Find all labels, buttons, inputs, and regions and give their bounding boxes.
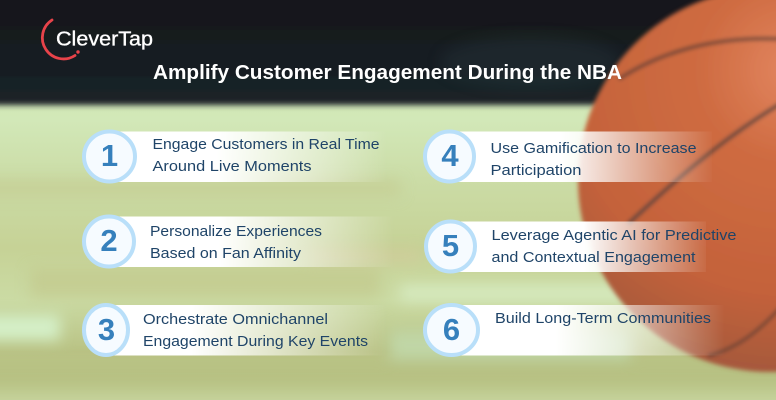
item 3: Orchestrate Omnichannel	[143, 311, 328, 328]
item 2	[84, 216, 395, 267]
item 4: Use Gamification to Increase	[490, 140, 696, 157]
item 4	[425, 132, 712, 182]
item 4: 4	[441, 138, 459, 173]
item 3: Engagement During Key Events	[143, 333, 368, 350]
item 2: Personalize Experiences	[150, 223, 322, 240]
item 6	[425, 305, 725, 356]
item 6: 6	[443, 312, 460, 347]
item 5: 5	[442, 228, 459, 263]
item 1: Around Live Moments	[152, 158, 312, 175]
logo: CleverTap	[42, 20, 153, 59]
item 1: 1	[101, 138, 118, 173]
item 3	[84, 305, 388, 356]
logo: CleverTap: CleverTap	[56, 28, 153, 50]
item 5	[426, 222, 736, 272]
item 1: Engage Customers in Real Time	[152, 136, 380, 153]
basketball	[578, 0, 776, 372]
item 2: Based on Fan Affinity	[150, 245, 302, 262]
item 2: 2	[100, 223, 118, 258]
title: Amplify Customer Engagement During the NBA	[153, 62, 622, 84]
item 1	[84, 132, 388, 182]
item 5: Leverage Agentic AI for Predictive	[492, 227, 736, 244]
item 4: Participation	[490, 162, 582, 179]
item 6: Build Long-Term Communities	[495, 310, 711, 327]
item 5: and Contextual Engagement	[492, 249, 696, 266]
item 3: 3	[98, 312, 115, 347]
